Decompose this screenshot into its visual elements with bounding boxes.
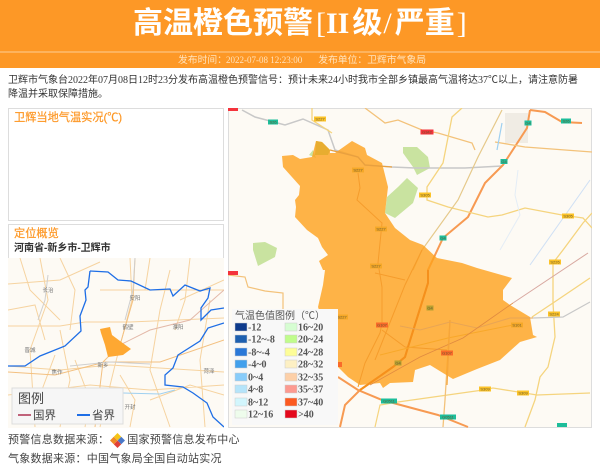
- warning area: Weihui: [282, 141, 537, 388]
- temperature legend: -4~0: [248, 360, 267, 370]
- road shields: G107: [377, 322, 388, 328]
- road shields: S226: [550, 260, 560, 264]
- road shields: S227: [315, 116, 325, 122]
- road shields: S227: [337, 314, 347, 320]
- temperature legend: 35~37: [298, 384, 323, 396]
- road shields: S227: [353, 168, 363, 172]
- road shields: [228, 108, 574, 427]
- panel heading: local temperature: 卫辉当地气温实况(℃): [14, 112, 122, 124]
- Weihui region highlight: [100, 327, 131, 357]
- temperature legend: -12~-8: [248, 334, 275, 346]
- icon: warning center logo: [110, 433, 125, 448]
- province border: [8, 271, 224, 427]
- road shields: S26: [562, 118, 570, 124]
- city labels: 长治: [42, 286, 54, 294]
- temperature legend: 37~40: [298, 398, 323, 408]
- road shields: G107: [442, 350, 453, 356]
- city labels: 菏泽: [203, 367, 215, 375]
- temperature legend: 20~24: [298, 334, 323, 346]
- road network: [228, 108, 592, 427]
- road shields: G0511: [383, 398, 396, 404]
- roads over warning area: [330, 150, 533, 390]
- temperature legend: >40: [298, 410, 314, 420]
- temperature legend: -8~-4: [248, 348, 270, 358]
- city block: [505, 113, 528, 143]
- temperature legend: 12~16: [248, 410, 273, 420]
- title: 高温橙色预警[II级/严重]: [133, 7, 467, 40]
- darker overlap patch: [315, 141, 330, 155]
- road shields: G342: [422, 130, 433, 134]
- header banner: [0, 0, 600, 68]
- legend: province border: 省界: [92, 409, 115, 422]
- road shields: S227: [376, 226, 386, 232]
- panel: local temperature: [8, 108, 224, 221]
- river: [123, 390, 175, 394]
- city labels: 濮阳: [172, 323, 184, 331]
- city labels: 安阳: [129, 294, 141, 302]
- road shields: S309: [480, 386, 490, 392]
- road shields: G4: [501, 159, 507, 164]
- locator map: [8, 258, 224, 428]
- heading: location overview: 定位概览: [14, 228, 59, 240]
- temperature legend title: 气温色值图例（℃）: [235, 309, 325, 322]
- temperature legend: 4~8: [248, 384, 263, 396]
- temperature legend: 32~35: [298, 372, 323, 384]
- panel: location overview: [8, 224, 224, 259]
- temperature legend: 16~20: [298, 322, 323, 334]
- city labels: 鹤壁: [122, 323, 134, 331]
- warning description: 卫辉市气象台2022年07月08日12时23分发布高温橙色预警信号：预计未来24小时我市全部乡镇最高气温将达37℃以上，请注意防暑: [8, 75, 578, 86]
- location path: 河南省-新乡市-卫辉市: [14, 243, 111, 254]
- temperature legend: [232, 309, 338, 425]
- publish info: 发布时间：2022-07-08 12:23:00 发布单位：卫辉市气象局: [178, 55, 426, 66]
- city labels: [24, 286, 215, 411]
- temperature legend: 28~32: [298, 360, 323, 370]
- green areas: [253, 147, 430, 266]
- legend title: 图例: [18, 391, 44, 406]
- road shields: S227: [371, 264, 381, 268]
- road shields: S305: [420, 192, 430, 198]
- temperature legend: 8~12: [248, 398, 268, 408]
- road shields: G4: [525, 120, 531, 126]
- city labels: 新乡: [97, 361, 109, 369]
- temperature legend: -12: [248, 322, 261, 334]
- road shields: S224: [549, 312, 559, 316]
- road shields: G4: [395, 360, 401, 366]
- legend: national border: 国界: [33, 409, 56, 422]
- city labels: 焦作: [51, 368, 63, 376]
- road shields: S309: [518, 390, 528, 396]
- legend: [12, 388, 123, 424]
- source line: weather data: 气象数据来源：中国气象局全国自动站实况: [8, 453, 222, 465]
- temperature legend: 0~4: [248, 372, 263, 384]
- temperature legend: 24~28: [298, 348, 323, 358]
- road shields: G4: [427, 306, 433, 310]
- warning description: [8, 74, 578, 100]
- road shields: S26: [269, 120, 277, 124]
- warning description: 降温并采取保障措施。: [8, 89, 108, 100]
- road shields: S101: [512, 322, 522, 328]
- main map: [228, 108, 592, 428]
- road shields: S305: [563, 214, 573, 218]
- city labels: 晋城: [24, 347, 36, 354]
- header divider: [0, 51, 600, 53]
- road shields: G4: [440, 236, 446, 240]
- city labels: 开封: [124, 403, 136, 411]
- road shields: G0511: [442, 414, 455, 420]
- source line: warning info: 预警信息数据来源： 国家预警信息发布中心: [8, 434, 240, 446]
